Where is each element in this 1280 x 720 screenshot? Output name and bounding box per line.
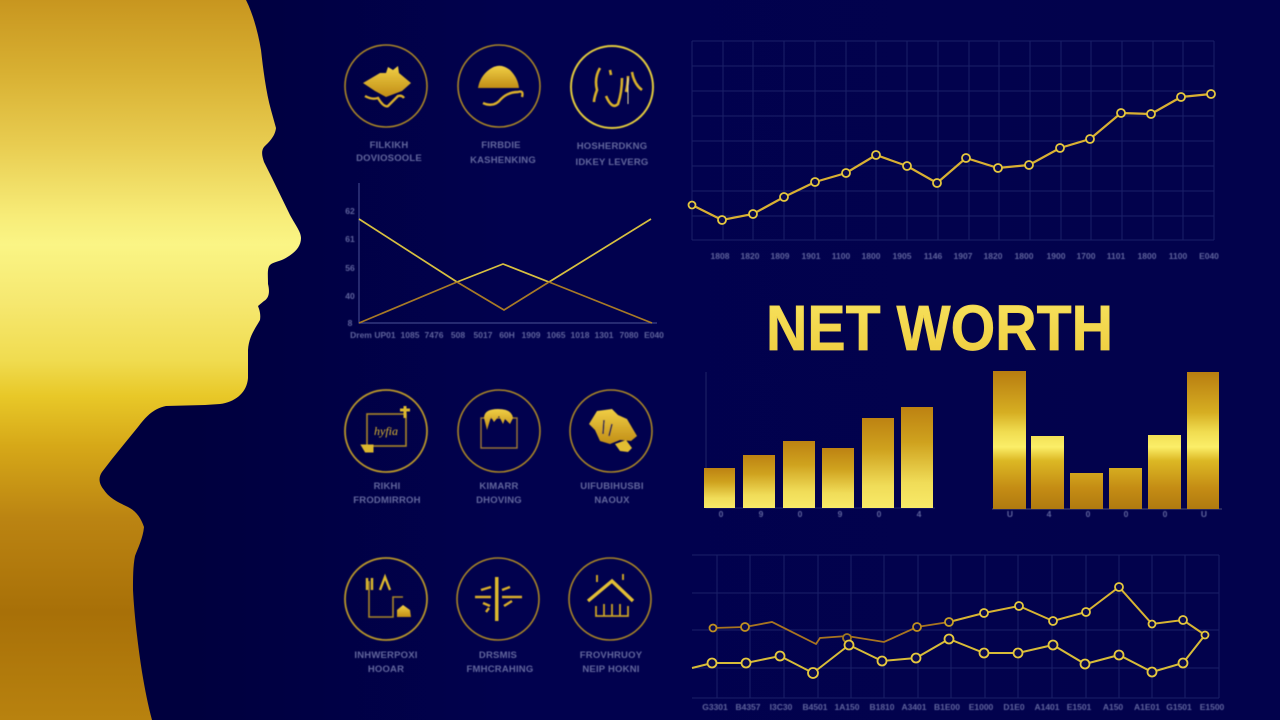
x axis labels: 1900 <box>1047 251 1066 261</box>
y axis labels: 8 <box>348 318 353 328</box>
ticks: 0 <box>877 509 882 519</box>
label: icon 5 <box>476 481 522 506</box>
x axis labels: 1085 <box>401 330 420 340</box>
bars <box>993 371 1219 509</box>
x axis labels: 1146 <box>924 251 942 261</box>
panel: icon row 3 <box>345 558 651 675</box>
panel: icon row 1 <box>345 45 653 168</box>
x axis labels: 1909 <box>522 330 541 340</box>
label: icon 6 <box>580 481 644 506</box>
series: lower yellow line <box>692 635 1205 673</box>
x axis labels: 1820 <box>984 251 1003 261</box>
x axis labels: D1E0 <box>1003 702 1025 712</box>
x axis labels: 1808 <box>711 251 730 261</box>
x axis labels: I3C30 <box>770 702 793 712</box>
ticks: 0 <box>1124 509 1129 519</box>
x axis labels: G1501 <box>1166 702 1192 712</box>
icon: document with arch <box>458 390 540 472</box>
y axis labels: 56 <box>345 263 355 273</box>
line <box>692 94 1211 220</box>
x axis labels: 1907 <box>954 251 973 261</box>
x axis labels <box>350 330 664 340</box>
x axis labels: UP01 <box>374 330 396 340</box>
ticks: U <box>1007 509 1013 519</box>
x axis labels: A3401 <box>901 702 927 712</box>
x axis labels: 508 <box>451 330 465 340</box>
label: icon 2 <box>470 140 536 166</box>
y axis labels <box>345 206 355 328</box>
x axis labels: 1800 <box>1138 251 1157 261</box>
x axis labels: E1000 <box>969 702 994 712</box>
icon: treasure shape <box>345 45 427 127</box>
ticks: 9 <box>759 509 764 519</box>
icon: squiggle glyph <box>571 46 653 128</box>
label: icon 4: FRODMIRROH <box>353 495 421 506</box>
label: icon 7: INHWERPOXI <box>354 650 418 661</box>
x axis labels: 1A150 <box>834 702 860 712</box>
markers <box>688 90 1215 224</box>
gold head silhouette <box>0 0 301 720</box>
x axis labels: 5017 <box>474 330 493 340</box>
series: brown segments <box>359 282 652 323</box>
icon: certificate frame: hyfia <box>374 424 398 438</box>
bar chart: symmetric bars <box>992 371 1222 519</box>
label: icon 8: FMHCRAHING <box>467 664 533 675</box>
y axis labels: 62 <box>345 206 355 216</box>
chart: crossing line chart <box>345 183 664 340</box>
label: icon 3 <box>576 141 648 168</box>
series: upper line, gold part <box>949 587 1205 635</box>
chart: bottom two-series line chart <box>692 555 1225 712</box>
label: icon 5: DHOVING <box>476 495 522 506</box>
x axis labels: 1800 <box>862 251 881 261</box>
x axis labels: 1100 <box>1169 251 1187 261</box>
x axis labels: 60H <box>499 330 515 340</box>
x axis labels: 1101 <box>1107 251 1125 261</box>
label: icon 8: DRSMIS <box>479 650 517 661</box>
label: icon 2: FIRBDIE <box>481 140 521 151</box>
ticks: U <box>1201 509 1207 519</box>
x axis labels: B1810 <box>869 702 895 712</box>
x axis labels: 1065 <box>547 330 566 340</box>
ticks: 0 <box>1086 509 1091 519</box>
x axis labels: 1901 <box>802 251 821 261</box>
icon: gold nugget <box>570 390 652 472</box>
title: NET WORTH <box>766 292 1113 364</box>
ticks: 0 <box>1163 509 1168 519</box>
label: icon 9 <box>580 650 643 675</box>
grid <box>692 555 1219 698</box>
series: yellow segments <box>359 219 651 282</box>
x axis labels: 1905 <box>893 251 912 261</box>
x axis labels <box>702 702 1225 712</box>
panel: icon row 2 <box>345 390 652 506</box>
ticks: 0 <box>798 509 803 519</box>
label: icon 3: IDKEY LEVERG <box>576 157 648 168</box>
ticks: 0 <box>719 509 724 519</box>
label: icon 5: KIMARR <box>479 481 519 492</box>
x axis labels: B4501 <box>802 702 828 712</box>
axis <box>706 372 935 508</box>
x axis labels <box>711 251 1219 261</box>
bar chart: rising bars <box>704 372 935 519</box>
ticks: 9 <box>838 509 843 519</box>
x axis labels: 1018 <box>571 330 590 340</box>
x axis labels: E1501 <box>1067 702 1092 712</box>
x axis labels: E040 <box>1199 251 1219 261</box>
x axis labels: G3301 <box>702 702 728 712</box>
icon: house <box>569 558 651 640</box>
ticks <box>1007 509 1207 519</box>
label: icon 4 <box>353 481 421 506</box>
x axis labels: Drem <box>350 330 372 340</box>
icon: helmet shape <box>458 45 540 127</box>
x axis labels: 1100 <box>832 251 850 261</box>
label: icon 1: DOVIOSOOLE <box>356 153 422 164</box>
x axis labels: E040 <box>644 330 664 340</box>
x axis labels: B4357 <box>735 702 761 712</box>
y axis labels: 40 <box>345 291 355 301</box>
x axis labels: 1820 <box>741 251 760 261</box>
x axis labels: 7476 <box>425 330 444 340</box>
axis <box>992 508 1222 510</box>
label: icon 6: NAOUX <box>594 495 630 506</box>
ticks: 4 <box>917 509 922 519</box>
x axis labels: 7080 <box>620 330 639 340</box>
x axis labels: B1E00 <box>934 702 960 712</box>
series: upper line, brown part <box>713 622 949 644</box>
x axis labels: A150 <box>1103 702 1123 712</box>
x axis labels: A1401 <box>1034 702 1060 712</box>
label: icon 4: RIKHI <box>374 481 400 492</box>
x axis labels: 1301 <box>595 330 614 340</box>
icon: central pillar glyph <box>457 558 539 640</box>
label: icon 7: HOOAR <box>368 664 404 675</box>
ticks <box>719 509 922 519</box>
label: icon 7 <box>354 650 418 675</box>
markers <box>708 583 1208 678</box>
ticks: 4 <box>1047 509 1052 519</box>
x axis labels: E1500 <box>1200 702 1225 712</box>
x axis labels: 1800 <box>1015 251 1034 261</box>
label: icon 3: HOSHERDKNG <box>577 141 647 152</box>
label: icon 1 <box>356 140 422 164</box>
label: icon 1: FILKIKH <box>370 140 408 151</box>
x axis labels: 1700 <box>1077 251 1096 261</box>
label: icon 9: NEIP HOKNI <box>582 664 640 675</box>
label: icon 2: KASHENKING <box>470 155 536 166</box>
label: icon 8 <box>467 650 533 675</box>
icon: certificate frame <box>345 390 427 472</box>
y axis labels: 61 <box>345 234 355 244</box>
icon: tools and pot <box>345 558 427 640</box>
axes <box>359 183 657 323</box>
label: icon 9: FROVHRUOY <box>580 650 643 661</box>
chart: top rising line chart <box>688 41 1219 261</box>
grid <box>692 41 1214 240</box>
x axis labels: A1E01 <box>1134 702 1160 712</box>
x axis labels: 1809 <box>771 251 790 261</box>
bars <box>704 407 933 508</box>
label: icon 6: UIFUBIHUSBI <box>580 481 644 492</box>
